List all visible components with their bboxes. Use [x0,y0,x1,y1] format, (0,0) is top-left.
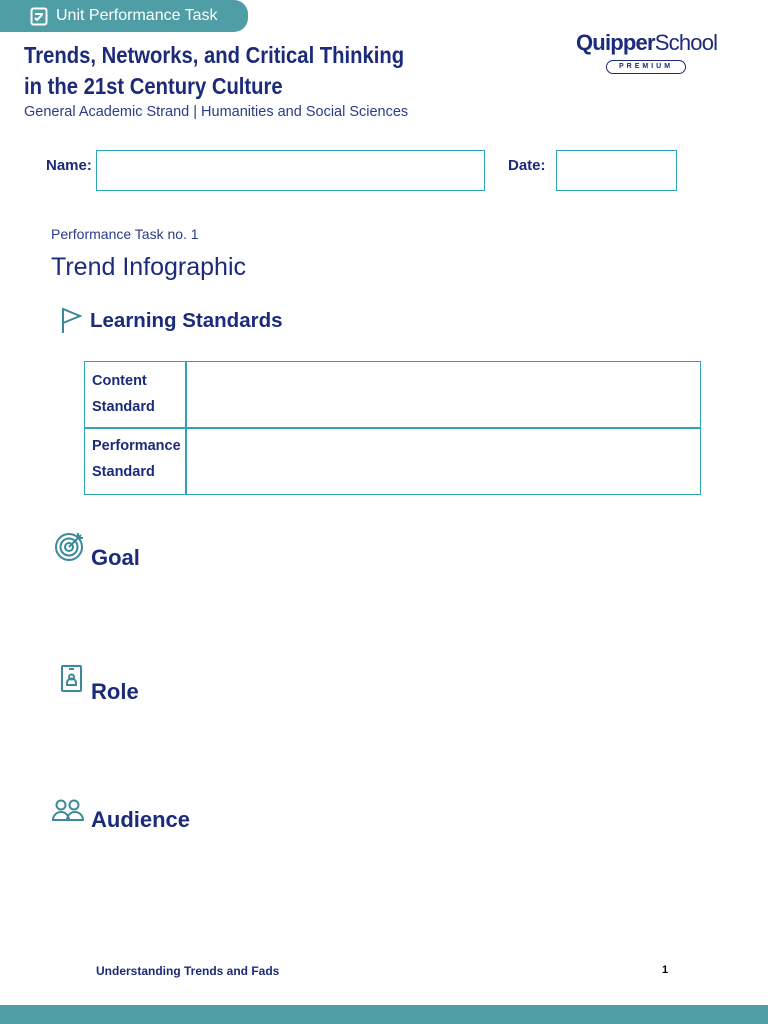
name field [46,150,485,191]
title: in the 21st Century Culture [24,73,283,99]
date field: Date: [508,157,546,174]
heading: Goal [55,533,140,570]
icon: target [55,533,83,561]
row: performance standard: Performance [92,438,181,454]
title: Trends, Networks, and Critical Thinking [24,42,404,68]
icon: people [52,800,84,821]
icon: flag [62,308,82,333]
icon: checklist [30,8,48,26]
heading: Learning Standards: Learning Standards [90,309,283,332]
task number: Performance Task no. 1 [51,226,199,242]
row: content standard: Content [92,373,147,389]
logo [576,30,717,74]
table: standards [84,361,701,495]
heading: Role: Role [91,679,139,704]
name field: Name: [46,157,92,174]
row: performance standard [92,438,181,480]
banner text: Unit Performance Task [56,7,218,24]
row: content standard: Standard [92,399,155,415]
row: performance standard: Standard [92,464,155,480]
heading: Role [61,665,139,704]
task title: Trend Infographic [51,253,246,281]
heading: Goal: Goal [91,545,140,570]
footer text: Understanding Trends and Fads [96,964,279,978]
icon: ID badge [61,665,82,692]
page number: 1 [662,964,668,976]
logo: PREMIUM [619,63,673,70]
footer bar [0,1005,768,1024]
banner: Unit Performance Task [0,0,248,32]
title [24,42,404,99]
heading: Audience: Audience [91,807,190,832]
subtitle: General Academic Strand | Humanities and Social Sciences [24,104,408,120]
row: content standard [92,373,155,415]
date field [508,150,677,191]
heading: Audience [52,800,190,832]
logo: QuipperSchool [576,30,717,55]
